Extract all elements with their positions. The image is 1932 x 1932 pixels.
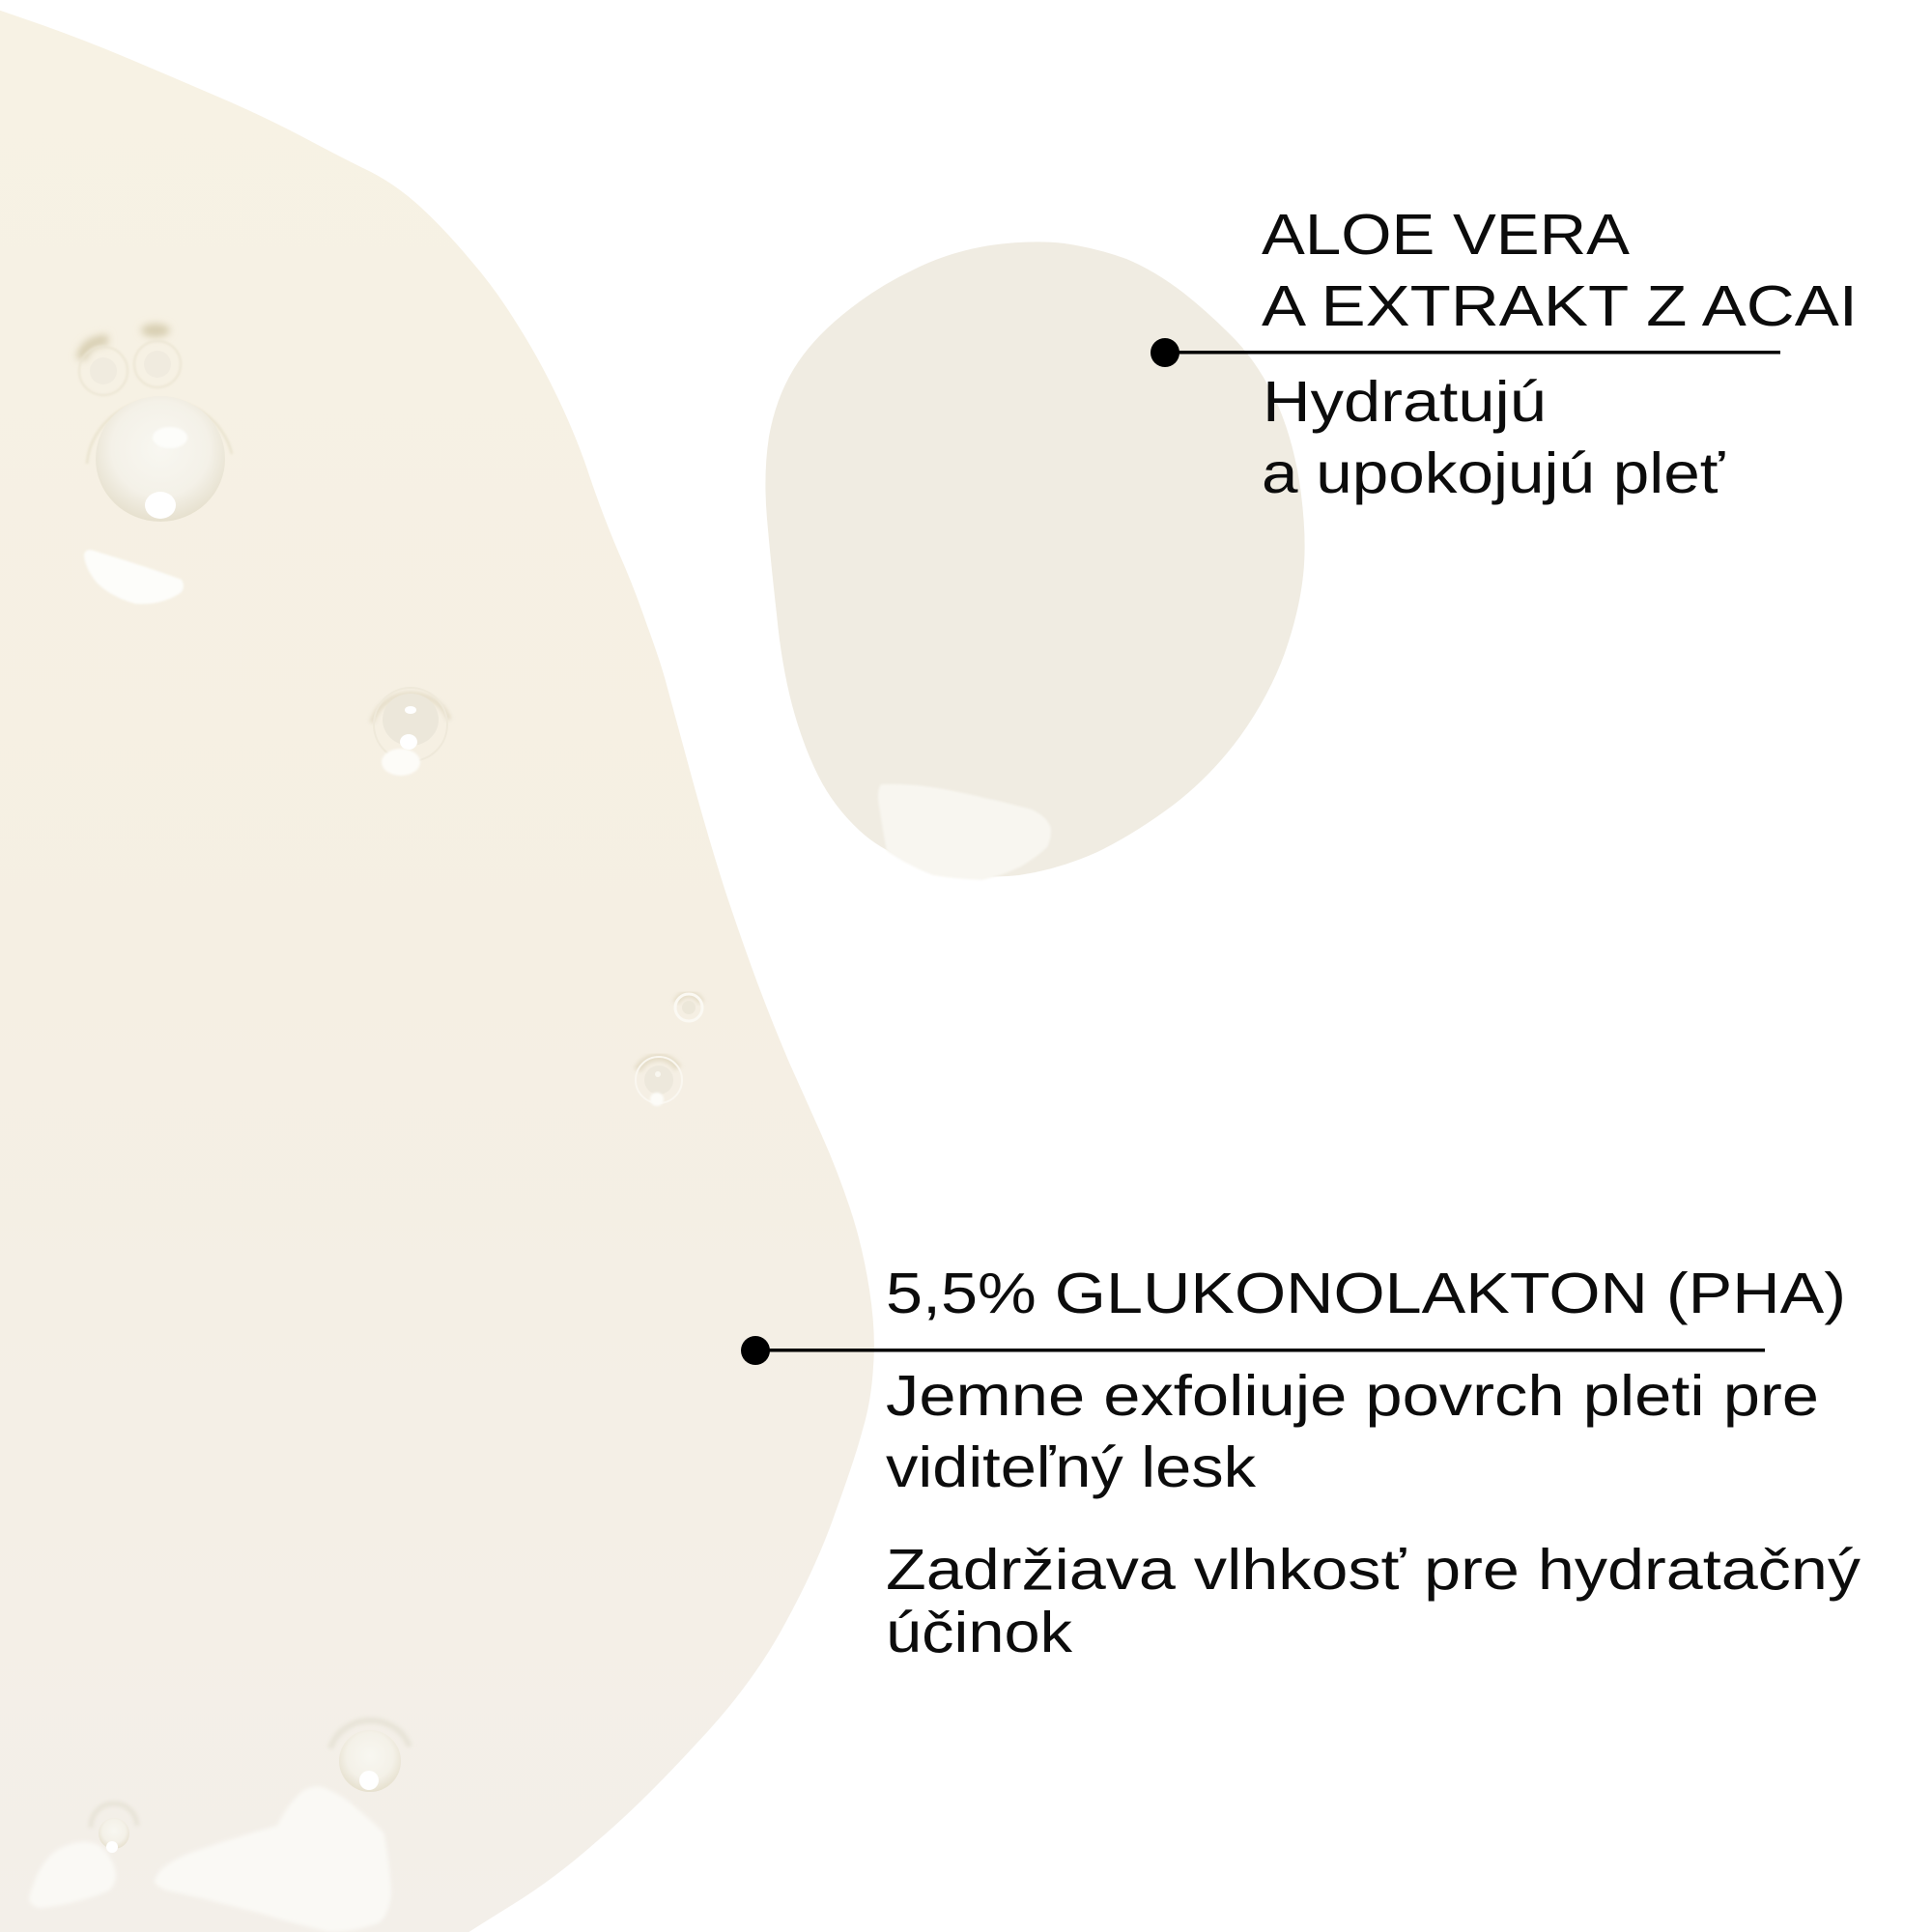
large serum blob: [0, 10, 874, 1932]
medium bubble: [372, 688, 449, 776]
description: moisture: Zadržiava vlhkosť pre hydratačný: [886, 1538, 1861, 1602]
description: exfoliation: viditeľný lesk: [886, 1435, 1257, 1499]
heading: aloe vera: [1262, 203, 1858, 338]
heading: glukonolakton: 5,5% GLUKONOLAKTON (PHA): [886, 1262, 1846, 1325]
description: hydration: [1262, 370, 1725, 505]
small bubble: [675, 994, 702, 1021]
description: exfoliation: Jemne exfoliuje povrch pleti pre: [886, 1364, 1819, 1428]
description: exfoliation: [886, 1364, 1819, 1499]
callout: aloe vera and acai: [1151, 203, 1858, 505]
callout: glukonolakton: [741, 1262, 1861, 1664]
bottom left bubble and highlight: [29, 1804, 137, 1908]
small serum droplet: [765, 242, 1305, 880]
leader line with dot: [741, 1336, 1765, 1365]
bottom bubble and highlight: [155, 1720, 410, 1932]
description: hydration: a upokojujú pleť: [1262, 441, 1725, 505]
droplet highlight: [878, 784, 1051, 880]
description: moisture: účinok: [886, 1601, 1073, 1664]
description: moisture: [886, 1538, 1861, 1664]
small bubble: [636, 1057, 682, 1106]
cluster of bubbles, top left: [79, 324, 232, 604]
heading: aloe vera: A EXTRAKT Z ACAI: [1262, 274, 1858, 338]
heading: aloe vera: ALOE VERA: [1262, 203, 1631, 267]
description: hydration: Hydratujú: [1263, 370, 1547, 434]
leader line with dot: [1151, 338, 1780, 367]
